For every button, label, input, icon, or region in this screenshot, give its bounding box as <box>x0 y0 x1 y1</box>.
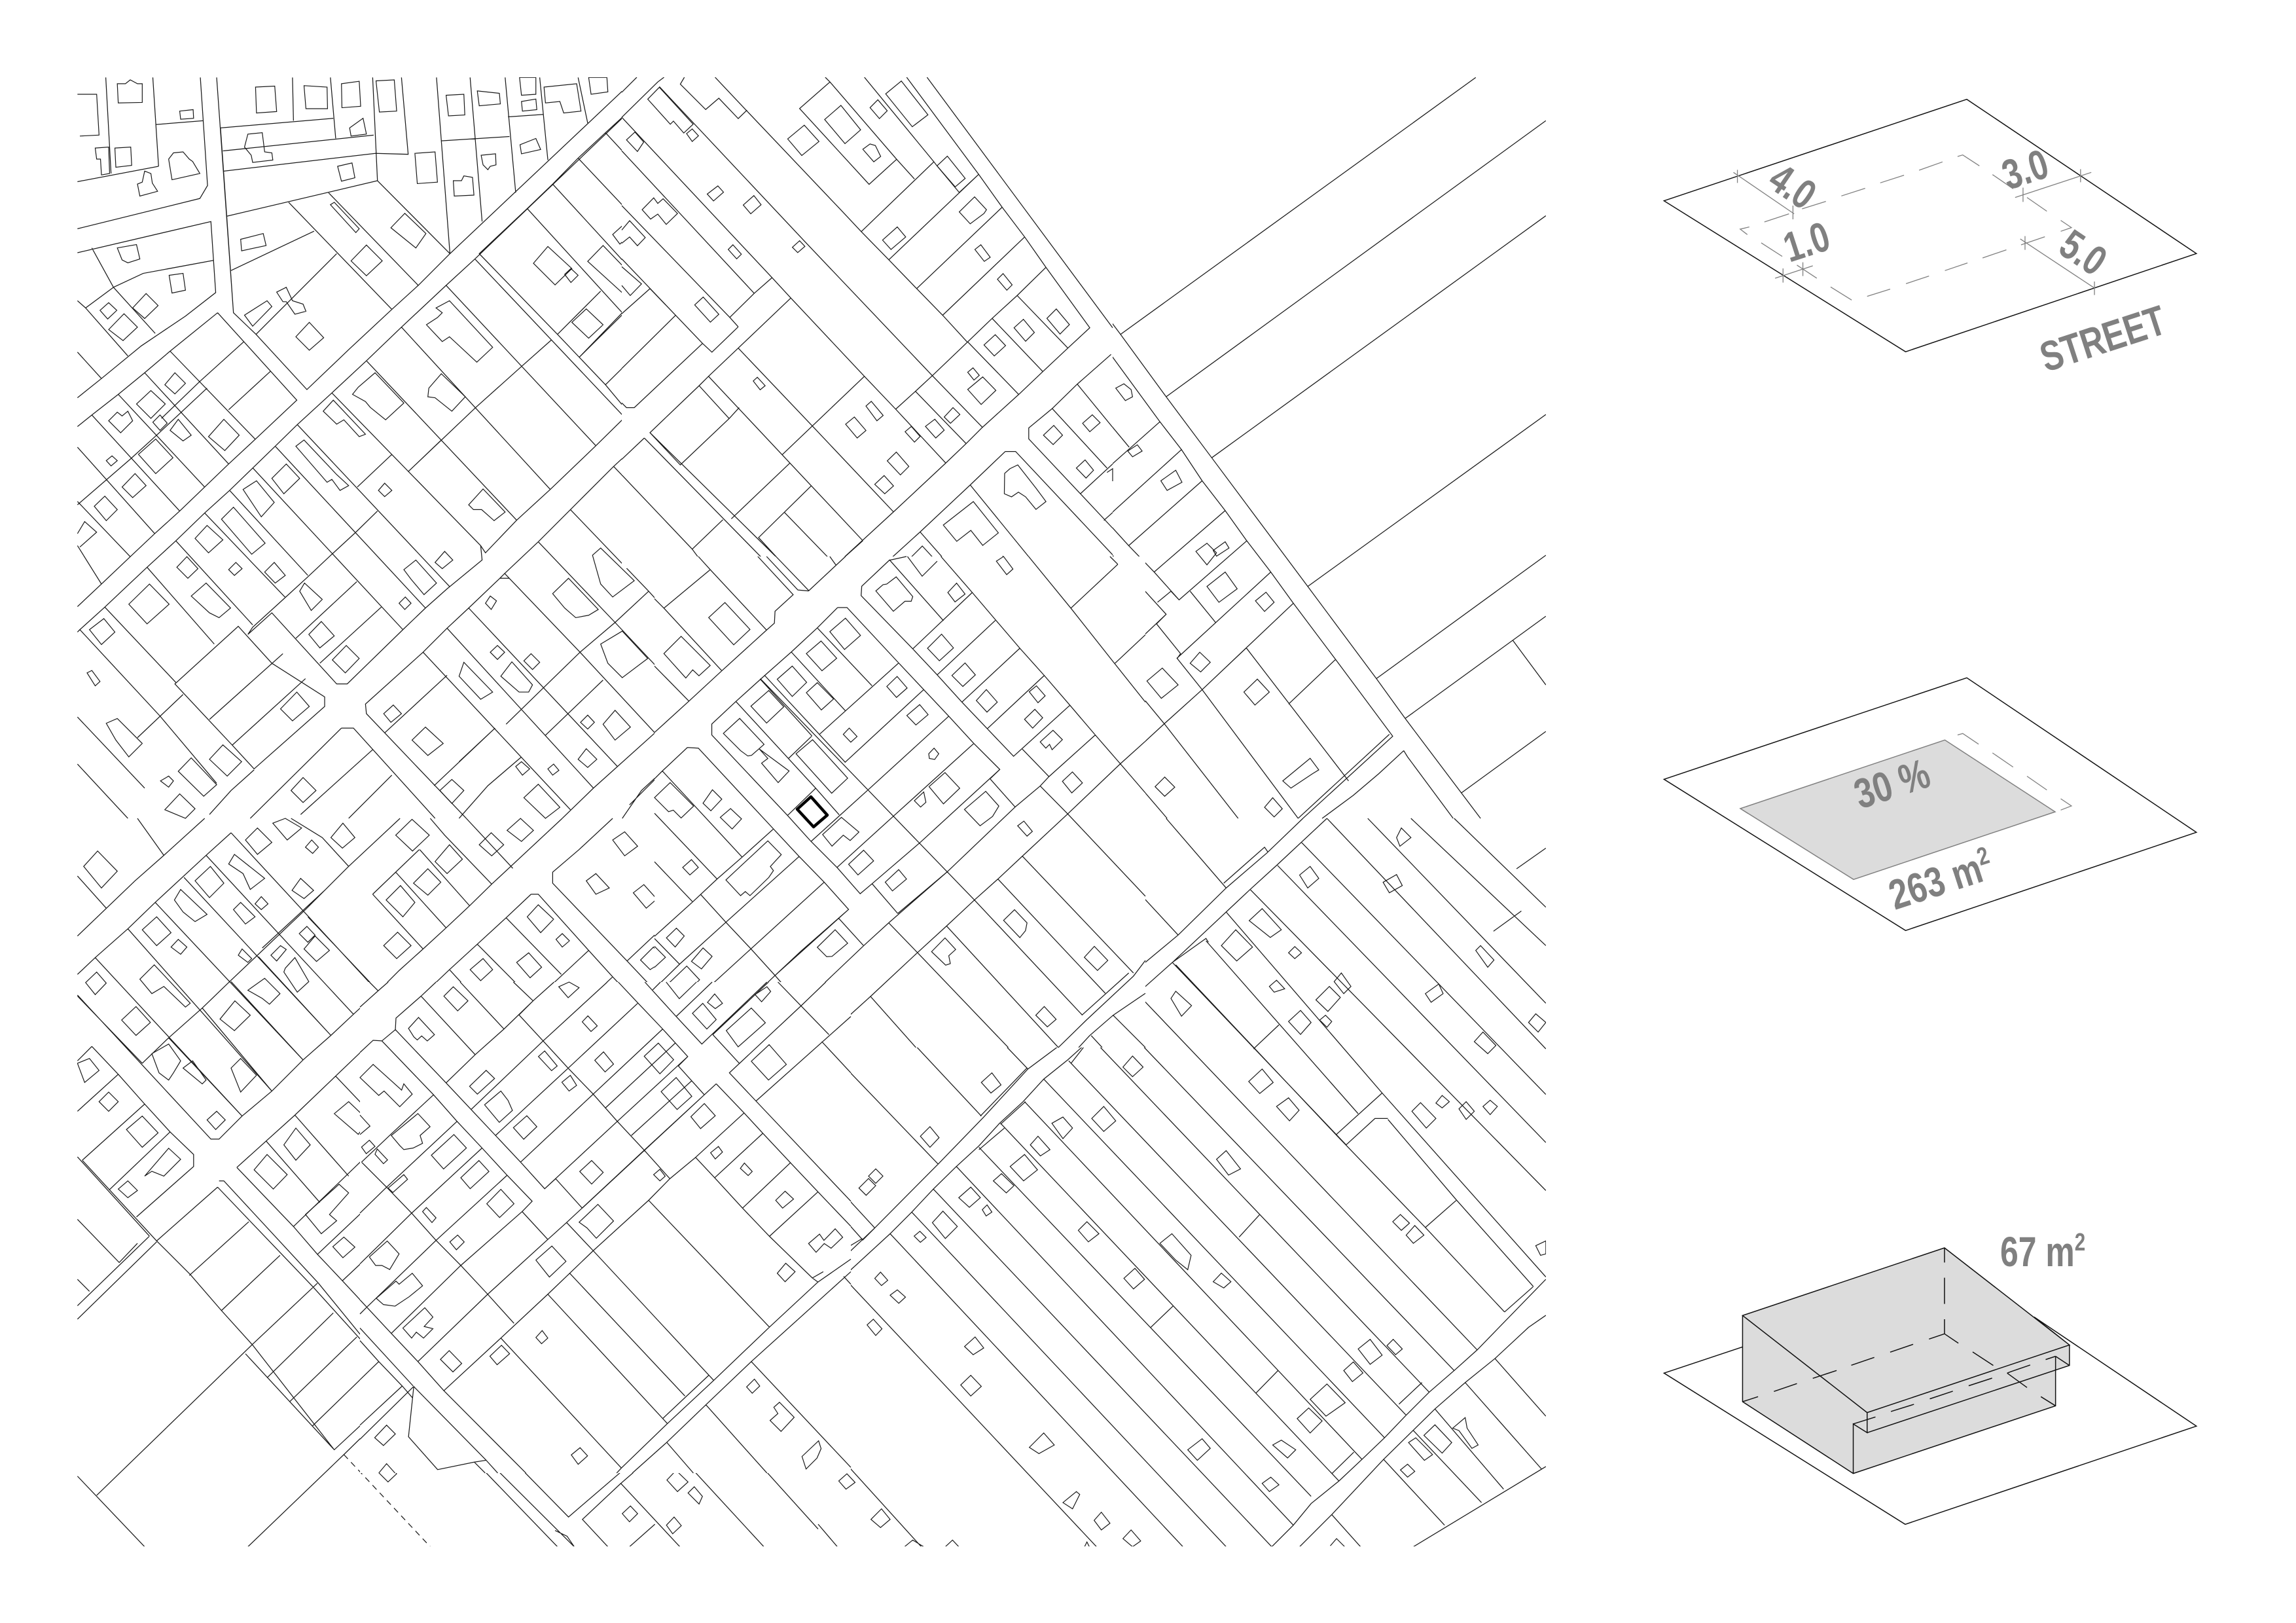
volume edges <box>1742 1248 2070 1474</box>
diagram 3: building volume on plot <box>1664 1248 2197 1524</box>
label: 1.0: 1.0 <box>1778 213 1835 272</box>
label: 67 m2: 2 <box>2075 1229 2085 1256</box>
dashed boundary <box>344 1455 430 1547</box>
label: 4.0: 4.0 <box>1761 155 1824 219</box>
label: 3.0: 3.0 <box>1996 141 2054 199</box>
highlighted subject building <box>797 797 827 827</box>
detail patch: upper-centre blocks <box>622 77 1113 568</box>
label: 30 %: 30 % <box>1849 750 1935 818</box>
map quadrant: north-west parcels and buildings <box>77 77 655 819</box>
buildings in lower-centre patch <box>360 982 843 1473</box>
diagram 2: buildable footprint on plot <box>1664 678 2197 930</box>
buildings in south-east quadrant <box>839 828 1546 1547</box>
buildings in north-west quadrant <box>77 77 648 818</box>
plot outline <box>1664 1317 2197 1524</box>
footprint shaded area <box>1740 740 2055 879</box>
label: 67 m2: 67 m <box>2000 1229 2075 1275</box>
detail patch: central blocks around subject plot <box>655 556 1145 1048</box>
label: 5.0: 5.0 <box>2051 221 2115 285</box>
setback dashes <box>1740 733 2072 857</box>
buildings in central patch <box>655 556 1108 1047</box>
buildings in upper-centre patch <box>622 81 1113 568</box>
label: 263 m2: 263 m <box>1884 846 1988 919</box>
buildings in north-east quadrant <box>1116 384 1319 817</box>
map quadrant: north-east parcels and long strips <box>1113 77 1546 818</box>
cadastral site map <box>77 77 1546 1547</box>
detail patch: lower-centre blocks <box>360 982 851 1473</box>
dashed setback line and dimension lines <box>1733 155 2094 300</box>
plot outline <box>1664 678 2197 930</box>
volume shaded fill <box>1742 1248 2070 1474</box>
hidden edges dashed <box>1742 1248 2056 1424</box>
plot outline <box>1664 100 2197 352</box>
label: STREET: STREET <box>2034 297 2172 381</box>
buildings in south-west quadrant <box>77 818 702 1534</box>
map quadrant: south-east parallel strip parcels <box>818 818 1546 1547</box>
map quadrant: south-west parcels and buildings <box>77 818 818 1547</box>
diagram 1: setbacks on plot <box>1664 100 2197 381</box>
label: 263 m2: 2 <box>1973 842 1992 871</box>
